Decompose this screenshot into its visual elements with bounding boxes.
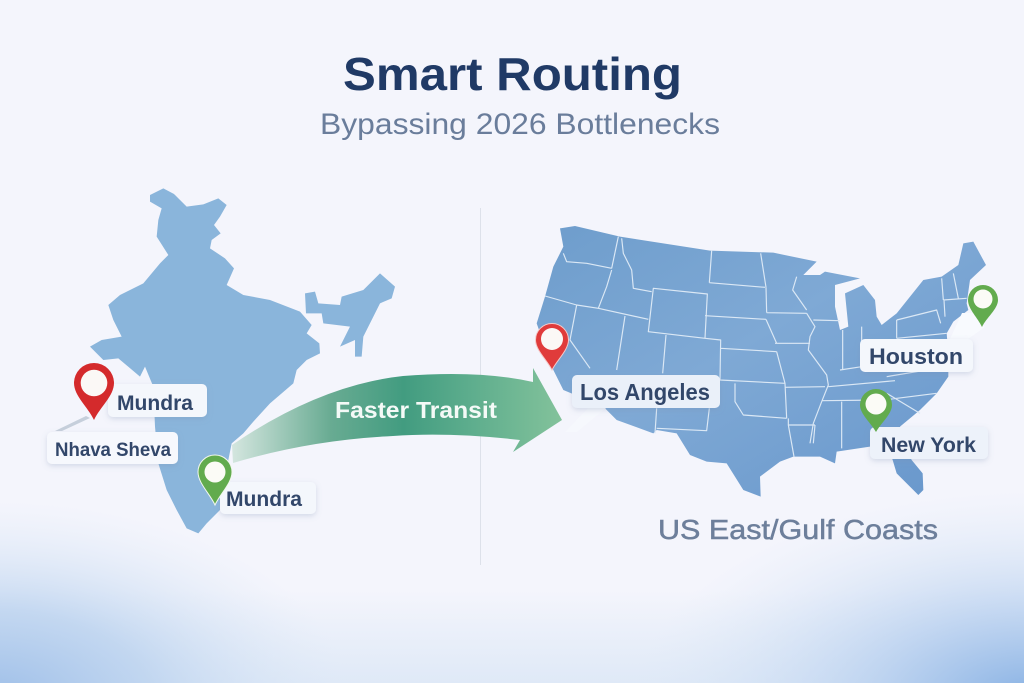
icon: green pin Houston: [968, 285, 998, 327]
icon: green pin south India: [198, 455, 232, 505]
title: Smart Routing: [343, 48, 682, 100]
divider: [480, 208, 481, 565]
icon: green pin New York: [860, 389, 892, 432]
label: Los Angeles: Los Angeles: [580, 379, 710, 405]
label: New York: [870, 427, 988, 459]
label: Mundra south: Mundra: [226, 488, 302, 511]
label: Mundra south: [220, 482, 316, 514]
label: New York: New York: [881, 434, 976, 457]
label: Houston: Houston: [869, 344, 963, 369]
map: United States: [537, 226, 986, 497]
arrow: Faster Transit: [232, 368, 562, 463]
label: Nhava Sheva: [47, 432, 178, 464]
caption: US East/Gulf Coasts: US East/Gulf Coasts: [658, 514, 938, 545]
leader: Houston: [950, 313, 985, 339]
leader: Los Angeles: [565, 408, 606, 432]
subtitle: Bypassing 2026 Bottlenecks: [320, 108, 720, 141]
icon: red pin Mundra: [74, 363, 114, 420]
label: Mundra west: Mundra: [117, 392, 193, 415]
arrow: Faster Transit: Faster Transit: [335, 397, 497, 423]
label: Mundra west: [108, 384, 207, 417]
label: Houston: [860, 339, 973, 372]
leader: Nhava Sheva: [55, 416, 90, 431]
icon: red pin Los Angeles: [536, 324, 568, 370]
label: Nhava Sheva: Nhava Sheva: [55, 440, 171, 461]
map: India: [90, 188, 395, 533]
